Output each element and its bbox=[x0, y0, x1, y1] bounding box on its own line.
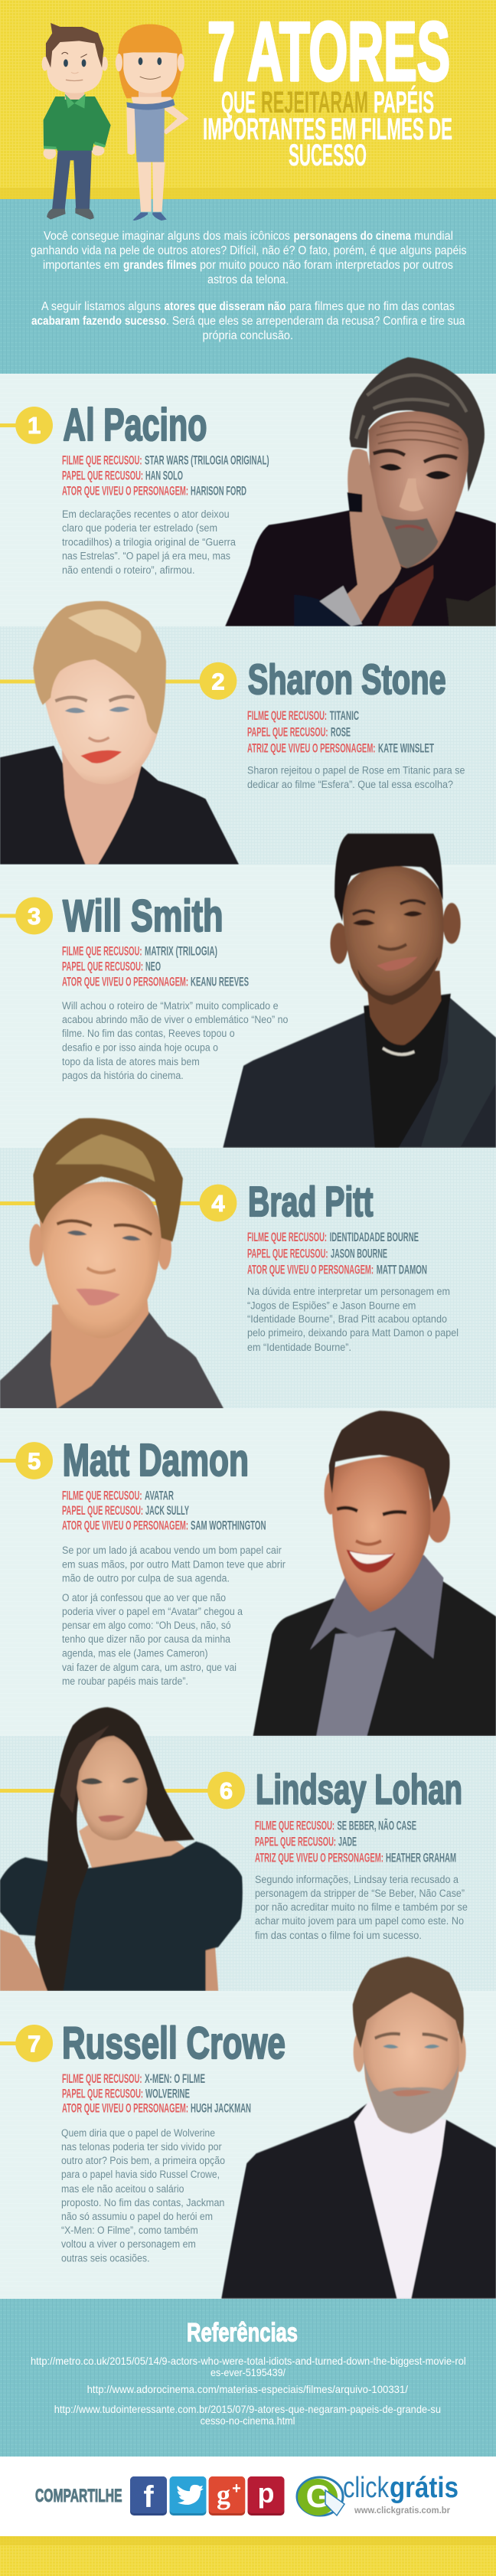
facts bbox=[62, 1489, 266, 1533]
facts: ATRIZ QUE VIVEU O PERSONAGEM: bbox=[247, 741, 375, 755]
description: vai fazer de algum cara, um astro, que vai bbox=[62, 1662, 237, 1673]
number badge 3 bbox=[0, 897, 53, 934]
facts: PAPEL QUE RECUSOU: bbox=[62, 1503, 143, 1518]
facts: MATT DAMON bbox=[377, 1262, 427, 1277]
facts: PAPEL QUE RECUSOU: bbox=[247, 1246, 328, 1260]
panel: references bbox=[0, 2299, 496, 2457]
illustration: woman bbox=[116, 25, 189, 221]
panel: Brad Pitt bbox=[0, 1118, 496, 1408]
facts: ATOR QUE VIVEU O PERSONAGEM: bbox=[247, 1262, 374, 1277]
description: Se por um lado já acabou vendo um bom papel cair bbox=[62, 1545, 282, 1556]
description: trocadilhos) a trilogia original de “Guerra bbox=[62, 536, 236, 548]
facts: SE BEBER, NÃO CASE bbox=[337, 1818, 416, 1833]
reference links: http://metro.co.uk/2015/05/14/9-actors-who-were-total-idiots-and-turned-down-the-biggest-movie-rol bbox=[31, 2355, 466, 2367]
heading: Russell Crowe bbox=[62, 2019, 286, 2068]
logo: clickgrátis: grátis bbox=[390, 2472, 458, 2504]
logo: clickgrátis: www.clickgratis.com.br bbox=[354, 2506, 450, 2516]
facts: MATRIX (TRILOGIA) bbox=[145, 943, 217, 959]
description: pagos da história do cinema. bbox=[62, 1070, 184, 1081]
description: não só assumiu o papel do herói em bbox=[61, 2211, 213, 2222]
number badge 7 bbox=[0, 2025, 53, 2062]
intro text: grandes filmes bbox=[123, 259, 197, 272]
intro text bbox=[31, 230, 467, 342]
description: mão de outro por culpa de sua agenda. bbox=[62, 1572, 230, 1584]
description: “X-Men: O Filme”, como também bbox=[61, 2225, 198, 2236]
description: nas telonas poderia ter sido vivido por bbox=[61, 2141, 222, 2153]
facts bbox=[247, 708, 434, 755]
facts: IDENTIDADADE BOURNE bbox=[330, 1230, 419, 1244]
description: desafio e por isso ainda hoje ocupa o bbox=[62, 1041, 218, 1053]
number badge 1 bbox=[0, 407, 53, 444]
facts: ATOR QUE VIVEU O PERSONAGEM: bbox=[62, 484, 188, 498]
facts bbox=[62, 943, 249, 989]
panel: footer bbox=[0, 2457, 496, 2536]
reference links: http://www.tudointeressante.com.br/2015/07/9-atores-que-negaram-papeis-de-grande-su bbox=[54, 2403, 441, 2415]
intro text: própria conclusão. bbox=[202, 329, 293, 342]
facts: WOLVERINE bbox=[145, 2086, 190, 2101]
description: outras seis ocasiões. bbox=[61, 2252, 150, 2264]
portrait: Brad Pitt bbox=[0, 1118, 224, 1408]
icon: pinterest: p bbox=[257, 2477, 274, 2509]
reference links: http://www.adorocinema.com/materias-especiais/filmes/arquivo-100331/ bbox=[87, 2383, 408, 2395]
description: O ator já confessou que ao ver que não bbox=[62, 1592, 226, 1603]
facts: HARISON FORD bbox=[191, 484, 246, 498]
number badge 6 bbox=[0, 1772, 245, 1809]
description: não entendi o roteiro”, afirmou. bbox=[62, 564, 194, 576]
panel: Will Smith bbox=[0, 834, 496, 1148]
description: em suas mãos, por outro Matt Damon teve que abrir bbox=[62, 1559, 286, 1570]
facts: ATOR QUE VIVEU O PERSONAGEM: bbox=[62, 974, 188, 989]
icon: google plus bbox=[209, 2476, 245, 2516]
intro text: importantes em bbox=[43, 259, 119, 272]
icon: facebook bbox=[130, 2476, 167, 2516]
intro text: ganhando vida na pele de outros atores? Difícil, não é? O fato, porém, é que alguns papéis bbox=[31, 244, 467, 257]
description: Em declarações recentes o ator deixou bbox=[62, 508, 230, 520]
portrait: Russell Crowe bbox=[221, 1957, 496, 2299]
description bbox=[62, 508, 236, 576]
reference links: es-ever-5195439/ bbox=[210, 2366, 286, 2378]
facts: KATE WINSLET bbox=[378, 741, 434, 755]
description: voltou a viver o personagem em bbox=[61, 2238, 196, 2250]
description bbox=[247, 1286, 458, 1353]
facts: PAPEL QUE RECUSOU: bbox=[62, 469, 143, 482]
description: em “Identidade Bourne”. bbox=[247, 1342, 351, 1353]
facts: JASON BOURNE bbox=[331, 1246, 387, 1260]
icon: pinterest bbox=[248, 2476, 285, 2516]
facts: AVATAR bbox=[145, 1489, 174, 1502]
number badge 6: 6 bbox=[220, 1777, 233, 1804]
facts: NEO bbox=[145, 959, 161, 973]
facts: FILME QUE RECUSOU: bbox=[62, 1489, 142, 1502]
portrait: Lindsay Lohan bbox=[0, 1707, 243, 1991]
facts: KEANU REEVES bbox=[191, 974, 249, 989]
description: Will achou o roteiro de “Matrix” muito complicado e bbox=[62, 1000, 279, 1012]
facts: ATRIZ QUE VIVEU O PERSONAGEM: bbox=[255, 1850, 383, 1865]
panel: Matt Damon bbox=[0, 1408, 496, 1736]
heading: Matt Damon bbox=[63, 1435, 249, 1486]
facts: PAPEL QUE RECUSOU: bbox=[62, 959, 143, 973]
facts: HAN SOLO bbox=[145, 469, 183, 482]
description: Segundo informações, Lindsay teria recusado a bbox=[255, 1874, 458, 1885]
facts bbox=[62, 453, 269, 498]
description: poderia viver o papel em “Avatar” chegou a bbox=[62, 1606, 243, 1617]
facts: FILME QUE RECUSOU: bbox=[255, 1819, 334, 1833]
share label: COMPARTILHE bbox=[35, 2486, 122, 2506]
facts: ATOR QUE VIVEU O PERSONAGEM: bbox=[62, 2101, 188, 2116]
facts: HUGH JACKMAN bbox=[191, 2101, 251, 2116]
heading: Al Pacino bbox=[63, 400, 207, 450]
number badge 2 bbox=[0, 662, 237, 700]
number badge 5: 5 bbox=[28, 1447, 41, 1475]
facts bbox=[255, 1818, 456, 1865]
facts: FILME QUE RECUSOU: bbox=[62, 943, 142, 959]
intro text: atores que disseram não bbox=[164, 300, 286, 313]
description bbox=[61, 2127, 225, 2264]
title: REJEITARAM bbox=[261, 86, 368, 119]
description: para o papel havia sido Russel Crowe, bbox=[61, 2169, 220, 2180]
number badge 4: 4 bbox=[211, 1190, 225, 1217]
description bbox=[62, 1545, 286, 1687]
facts: FILME QUE RECUSOU: bbox=[62, 453, 142, 467]
portrait: Al Pacino bbox=[225, 358, 496, 626]
facts bbox=[247, 1230, 427, 1277]
intro text: . Será que eles se arrependeram da recusa? Confira e tire sua bbox=[166, 315, 465, 328]
icon: google plus: g bbox=[217, 2480, 230, 2510]
number badge 2: 2 bbox=[211, 668, 225, 695]
footer band bbox=[0, 2536, 496, 2576]
portrait: Matt Damon bbox=[253, 1411, 496, 1736]
description: Na dúvida entre interpretar um personagem em bbox=[247, 1286, 450, 1297]
icon: google plus: + bbox=[232, 2480, 241, 2497]
portrait: Will Smith bbox=[223, 834, 496, 1148]
icon: twitter bbox=[170, 2476, 207, 2516]
description: outro ator? Pois bem, a primeira opção bbox=[61, 2155, 225, 2166]
facts bbox=[62, 2071, 251, 2116]
intro text: A seguir listamos alguns bbox=[41, 300, 161, 313]
facts: PAPEL QUE RECUSOU: bbox=[247, 724, 328, 739]
description: “Jogos de Espiões” e Jason Bourne em bbox=[247, 1299, 416, 1311]
number badge 3: 3 bbox=[28, 903, 41, 930]
facts: ATOR QUE VIVEU O PERSONAGEM: bbox=[62, 1518, 188, 1533]
description bbox=[255, 1874, 468, 1941]
facts: ROSE bbox=[331, 724, 351, 739]
description: pensar em algo como: “Oh Deus, não, só bbox=[62, 1620, 231, 1631]
panel: Lindsay Lohan bbox=[0, 1707, 496, 1991]
heading: Will Smith bbox=[63, 891, 224, 941]
description: topo da lista de atores mais bem bbox=[62, 1056, 200, 1067]
panel: header bbox=[0, 0, 496, 374]
number badge 7: 7 bbox=[28, 2031, 41, 2057]
title: PAPÉIS bbox=[374, 85, 434, 119]
facts: JACK SULLY bbox=[145, 1503, 189, 1518]
description: Quem diria que o papel de Wolverine bbox=[61, 2127, 215, 2139]
number badge 5 bbox=[0, 1442, 53, 1479]
description: filme. No fim das contas, Reeves topou o bbox=[62, 1028, 235, 1039]
reference links bbox=[31, 2355, 466, 2427]
icon: facebook: f bbox=[143, 2480, 154, 2514]
description: claro que poderia ter estrelado (sem bbox=[62, 522, 217, 534]
description: mas ele não aceitou o salário bbox=[61, 2183, 184, 2195]
number badge 4 bbox=[0, 1185, 237, 1221]
logo: clickgrátis: G bbox=[306, 2478, 331, 2514]
description: fim das contas o filme foi um sucesso. bbox=[255, 1930, 422, 1941]
facts: SAM WORTHINGTON bbox=[191, 1518, 266, 1533]
intro text: para filmes que no fim das contas bbox=[289, 300, 455, 313]
facts: FILME QUE RECUSOU: bbox=[62, 2071, 142, 2086]
description: pelo primeiro, deixando para Matt Damon o papel bbox=[247, 1327, 458, 1339]
facts: TITANIC bbox=[330, 708, 359, 723]
intro text: personagens do cinema bbox=[294, 230, 411, 243]
facts: X-MEN: O FILME bbox=[145, 2071, 205, 2086]
description: acabou abrindo mão de viver o emblemático “Neo” no bbox=[62, 1014, 288, 1025]
logo: clickgrátis: click bbox=[343, 2472, 390, 2504]
title: SUCESSO bbox=[289, 139, 367, 172]
title bbox=[203, 5, 452, 172]
heading: Referências bbox=[187, 2319, 298, 2348]
intro text: mundial bbox=[414, 230, 453, 243]
reference links: cesso-no-cinema.html bbox=[201, 2414, 295, 2427]
facts: FILME QUE RECUSOU: bbox=[247, 1230, 327, 1244]
logo: clickgrátis bbox=[297, 2472, 458, 2516]
description: me roubar papéis mais tarde”. bbox=[62, 1675, 188, 1687]
facts: FILME QUE RECUSOU: bbox=[247, 708, 327, 723]
description: achar muito jovem para um papel como este. No bbox=[255, 1915, 464, 1927]
facts: JADE bbox=[338, 1835, 357, 1849]
description: agenda, mas ele (James Cameron) bbox=[62, 1648, 208, 1659]
facts: PAPEL QUE RECUSOU: bbox=[62, 2086, 143, 2101]
facts: STAR WARS (TRILOGIA ORIGINAL) bbox=[145, 453, 269, 467]
description: Sharon rejeitou o papel de Rose em Titanic para se bbox=[247, 765, 465, 776]
facts: PAPEL QUE RECUSOU: bbox=[255, 1835, 336, 1849]
description: tenho que dizer não por causa da minha bbox=[62, 1633, 230, 1645]
intro text: astros da telona. bbox=[207, 273, 289, 286]
panel: Russell Crowe bbox=[0, 1957, 496, 2299]
illustration: man bbox=[42, 23, 111, 220]
description: proposto. No fim das contas, Jackman bbox=[61, 2197, 224, 2208]
panel: Al Pacino bbox=[0, 358, 496, 626]
description: “Identidade Bourne”, Brad Pitt acabou optando bbox=[247, 1313, 447, 1325]
description: dedicar ao filme “Esfera”. Que tal essa escolha? bbox=[247, 779, 453, 790]
panel: Sharon Stone bbox=[0, 601, 496, 865]
description: nas Estrelas”. “O papel já era meu, mas bbox=[62, 551, 230, 562]
intro text: por muito pouco não foram interpretados por outros bbox=[200, 259, 453, 272]
description: personagem da stripper de “Se Beber, Não Case” bbox=[255, 1888, 465, 1899]
heading: Brad Pitt bbox=[248, 1178, 373, 1225]
title: QUE bbox=[221, 86, 256, 119]
description bbox=[247, 765, 465, 790]
intro text: Você consegue imaginar alguns dos mais icônicos bbox=[44, 230, 290, 243]
number badge 1: 1 bbox=[28, 412, 41, 439]
description bbox=[62, 1000, 288, 1081]
portrait: Sharon Stone bbox=[0, 601, 239, 865]
intro text: acabaram fazendo sucesso bbox=[31, 315, 166, 328]
description: por não acreditar muito no filme e também por se bbox=[255, 1901, 468, 1913]
